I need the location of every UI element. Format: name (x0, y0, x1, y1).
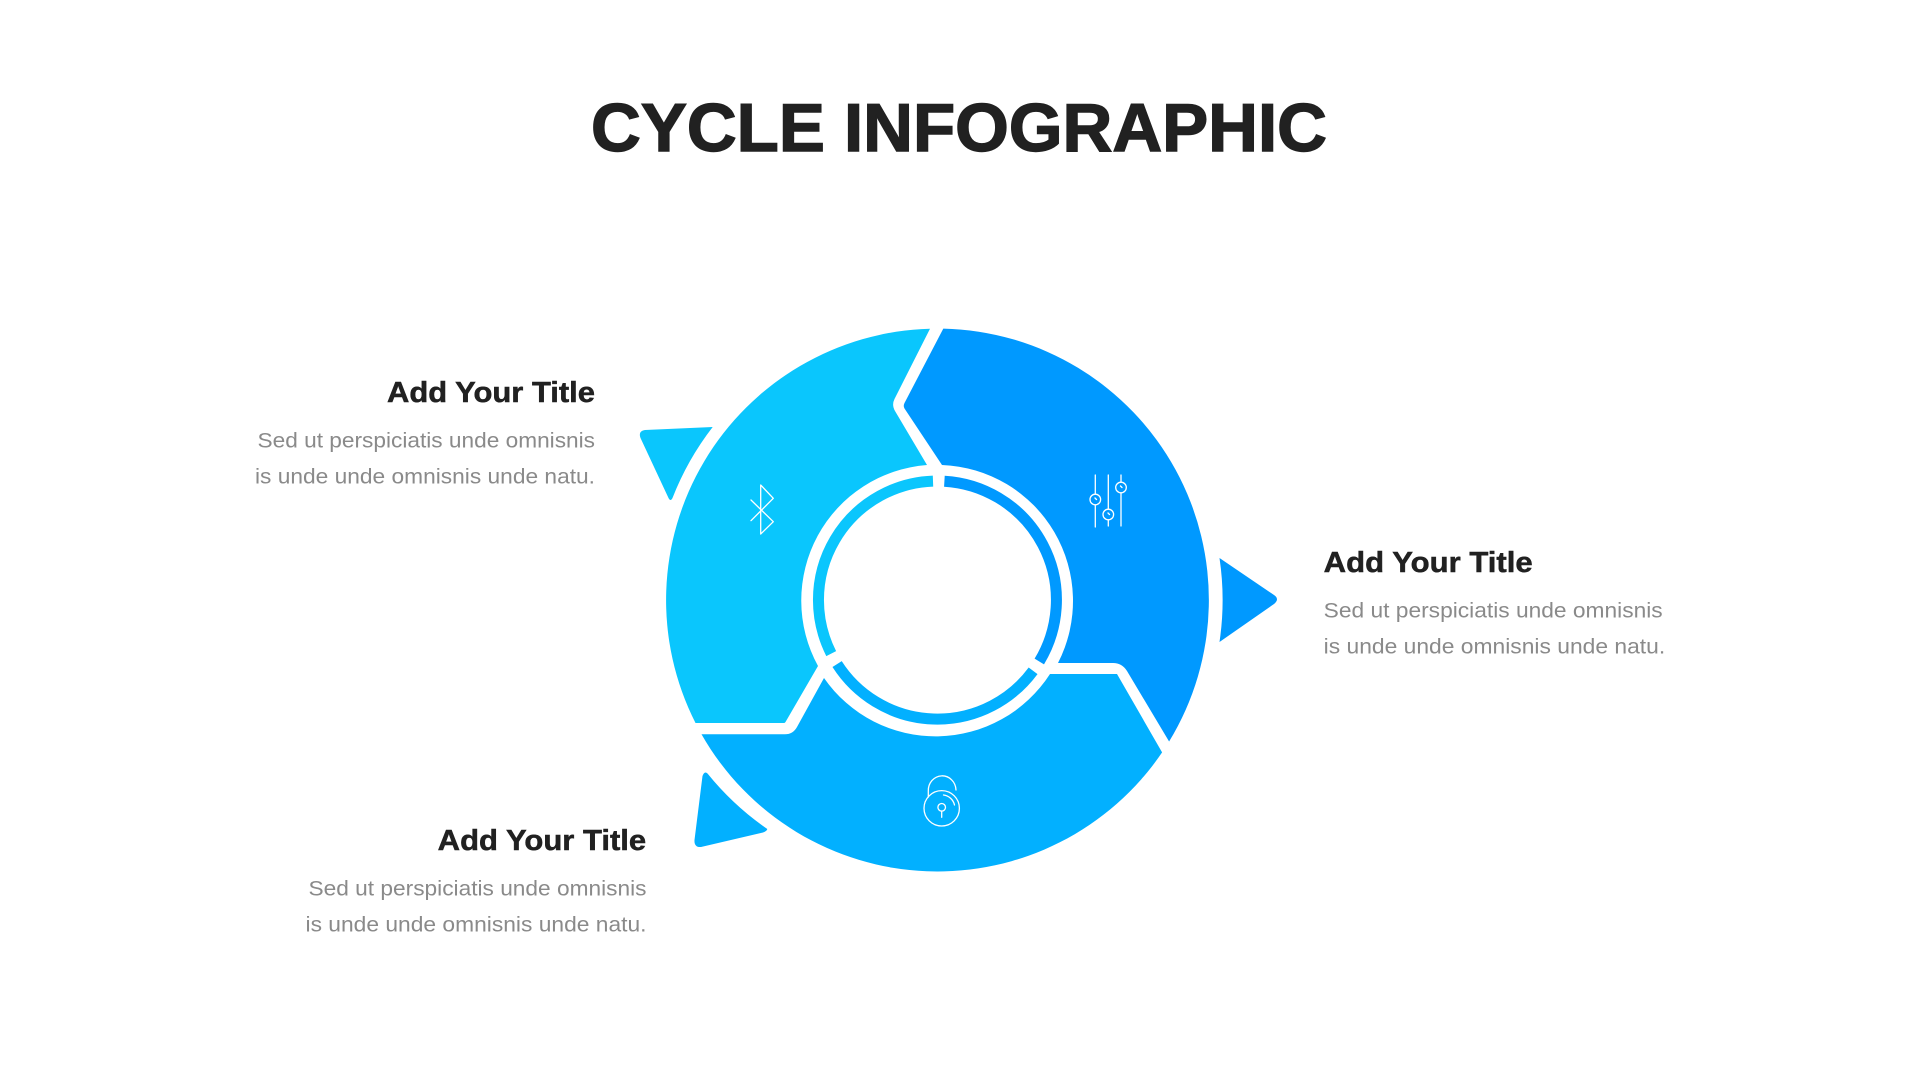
body text: Sed ut perspiciatis unde omnisnis (1324, 600, 1663, 622)
segment: mid blue bottom (702, 674, 1162, 871)
body text (255, 430, 595, 488)
text block: bottom left (306, 825, 646, 936)
text block: top left (255, 377, 595, 488)
text block: right (1324, 547, 1665, 658)
heading: Add Your Title (387, 377, 595, 409)
body text: is unde unde omnisnis unde natu. (1324, 636, 1665, 658)
segment: light cyan left (666, 329, 930, 723)
heading: Add Your Title (1324, 547, 1533, 579)
cycle diagram (640, 329, 1277, 871)
inner ring arc: light cyan (818, 481, 933, 654)
body text: Sed ut perspiciatis unde omnisnis (258, 430, 595, 452)
arrow: right (1220, 558, 1277, 642)
body text: is unde unde omnisnis unde natu. (306, 914, 646, 936)
inner ring arc: deep blue (944, 481, 1056, 662)
body text: Sed ut perspiciatis unde omnisnis (308, 878, 646, 900)
icon: bluetooth (751, 485, 773, 534)
arrow: top left (640, 427, 713, 500)
body text: is unde unde omnisnis unde natu. (255, 466, 595, 488)
heading: Add Your Title (438, 825, 646, 857)
arrow: bottom left (694, 772, 767, 847)
body text (1324, 600, 1665, 658)
segment: deep blue right (904, 329, 1209, 742)
body text (306, 878, 646, 936)
icon: sliders (1090, 475, 1126, 527)
inner ring arc: mid blue (837, 664, 1033, 719)
title: CYCLE INFOGRAPHIC (591, 90, 1327, 166)
icon: open padlock (924, 776, 959, 826)
